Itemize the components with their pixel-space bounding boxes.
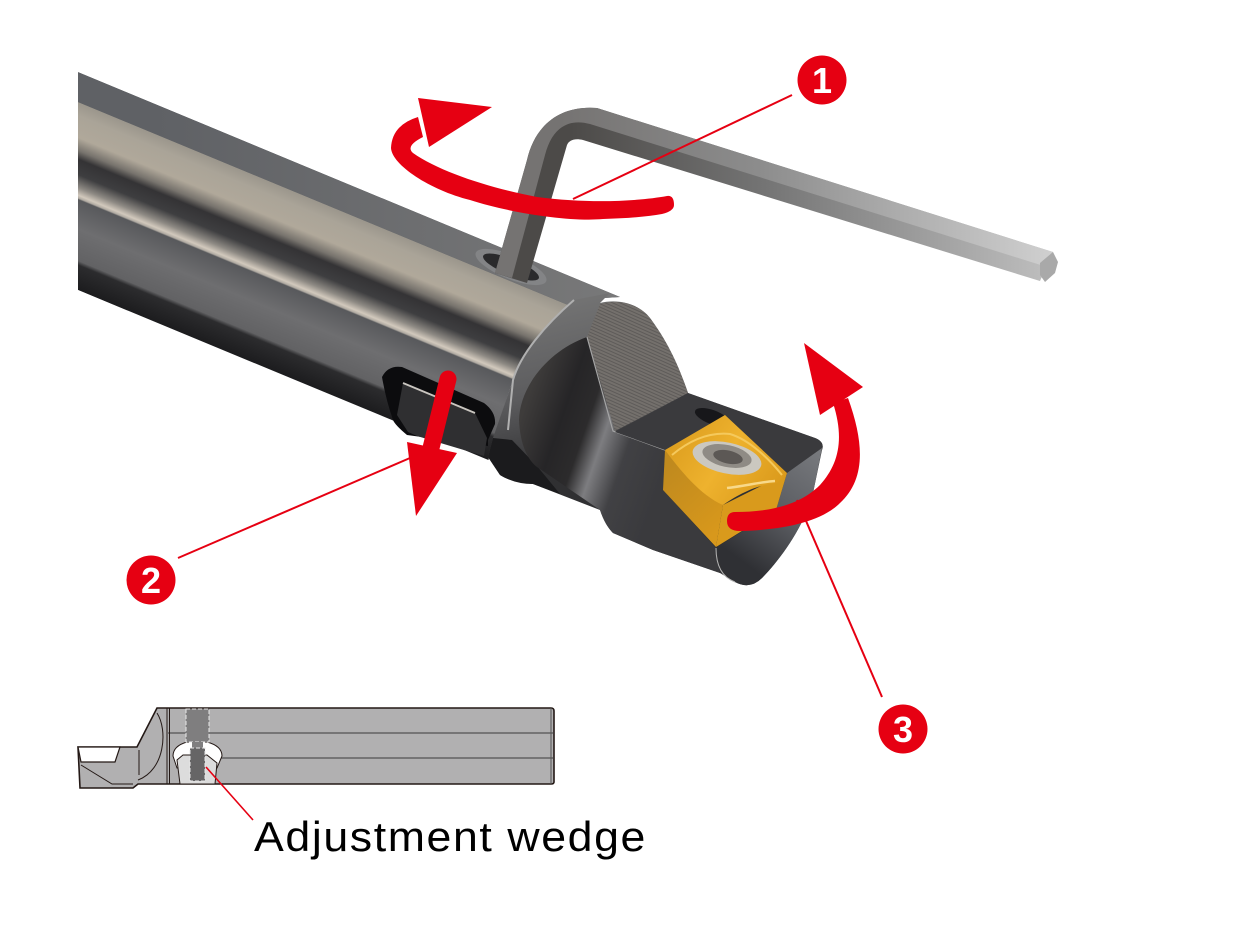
diagram screw <box>186 709 209 781</box>
red arrow 3 <box>727 343 863 531</box>
red arrow 2 <box>407 379 457 516</box>
red arrow 1 <box>391 98 674 220</box>
pocket top <box>615 393 823 473</box>
wedge slot <box>382 367 495 456</box>
callout 3 <box>878 704 928 754</box>
diagram leader arrow <box>206 767 253 820</box>
photo: tool head <box>488 293 823 585</box>
callout 2: 2 <box>141 560 161 601</box>
leader line 2 <box>178 458 410 558</box>
screw hole <box>471 242 551 292</box>
label: adjustment wedge: Adjustment wedge <box>254 813 647 860</box>
technical side view diagram <box>78 708 554 820</box>
hex key <box>495 108 1058 283</box>
end face <box>716 448 822 585</box>
leader line 3 <box>797 500 882 697</box>
infographic canvas <box>77 56 1058 860</box>
callout 1: 1 <box>812 60 832 101</box>
insert screw <box>690 436 764 480</box>
serrated clamp surface <box>587 302 688 431</box>
diagram insert <box>78 747 120 762</box>
diagram adjustment wedge <box>177 755 217 784</box>
callout 2 <box>126 556 176 604</box>
hex key end <box>1040 252 1058 282</box>
photo: boring bar shaft <box>78 72 620 460</box>
callout 1 <box>798 56 846 104</box>
leader line 1 <box>573 95 792 199</box>
large machined face <box>519 337 720 573</box>
callout 3: 3 <box>893 709 913 750</box>
diagram white pocket <box>173 742 222 768</box>
carbide insert <box>663 415 787 547</box>
